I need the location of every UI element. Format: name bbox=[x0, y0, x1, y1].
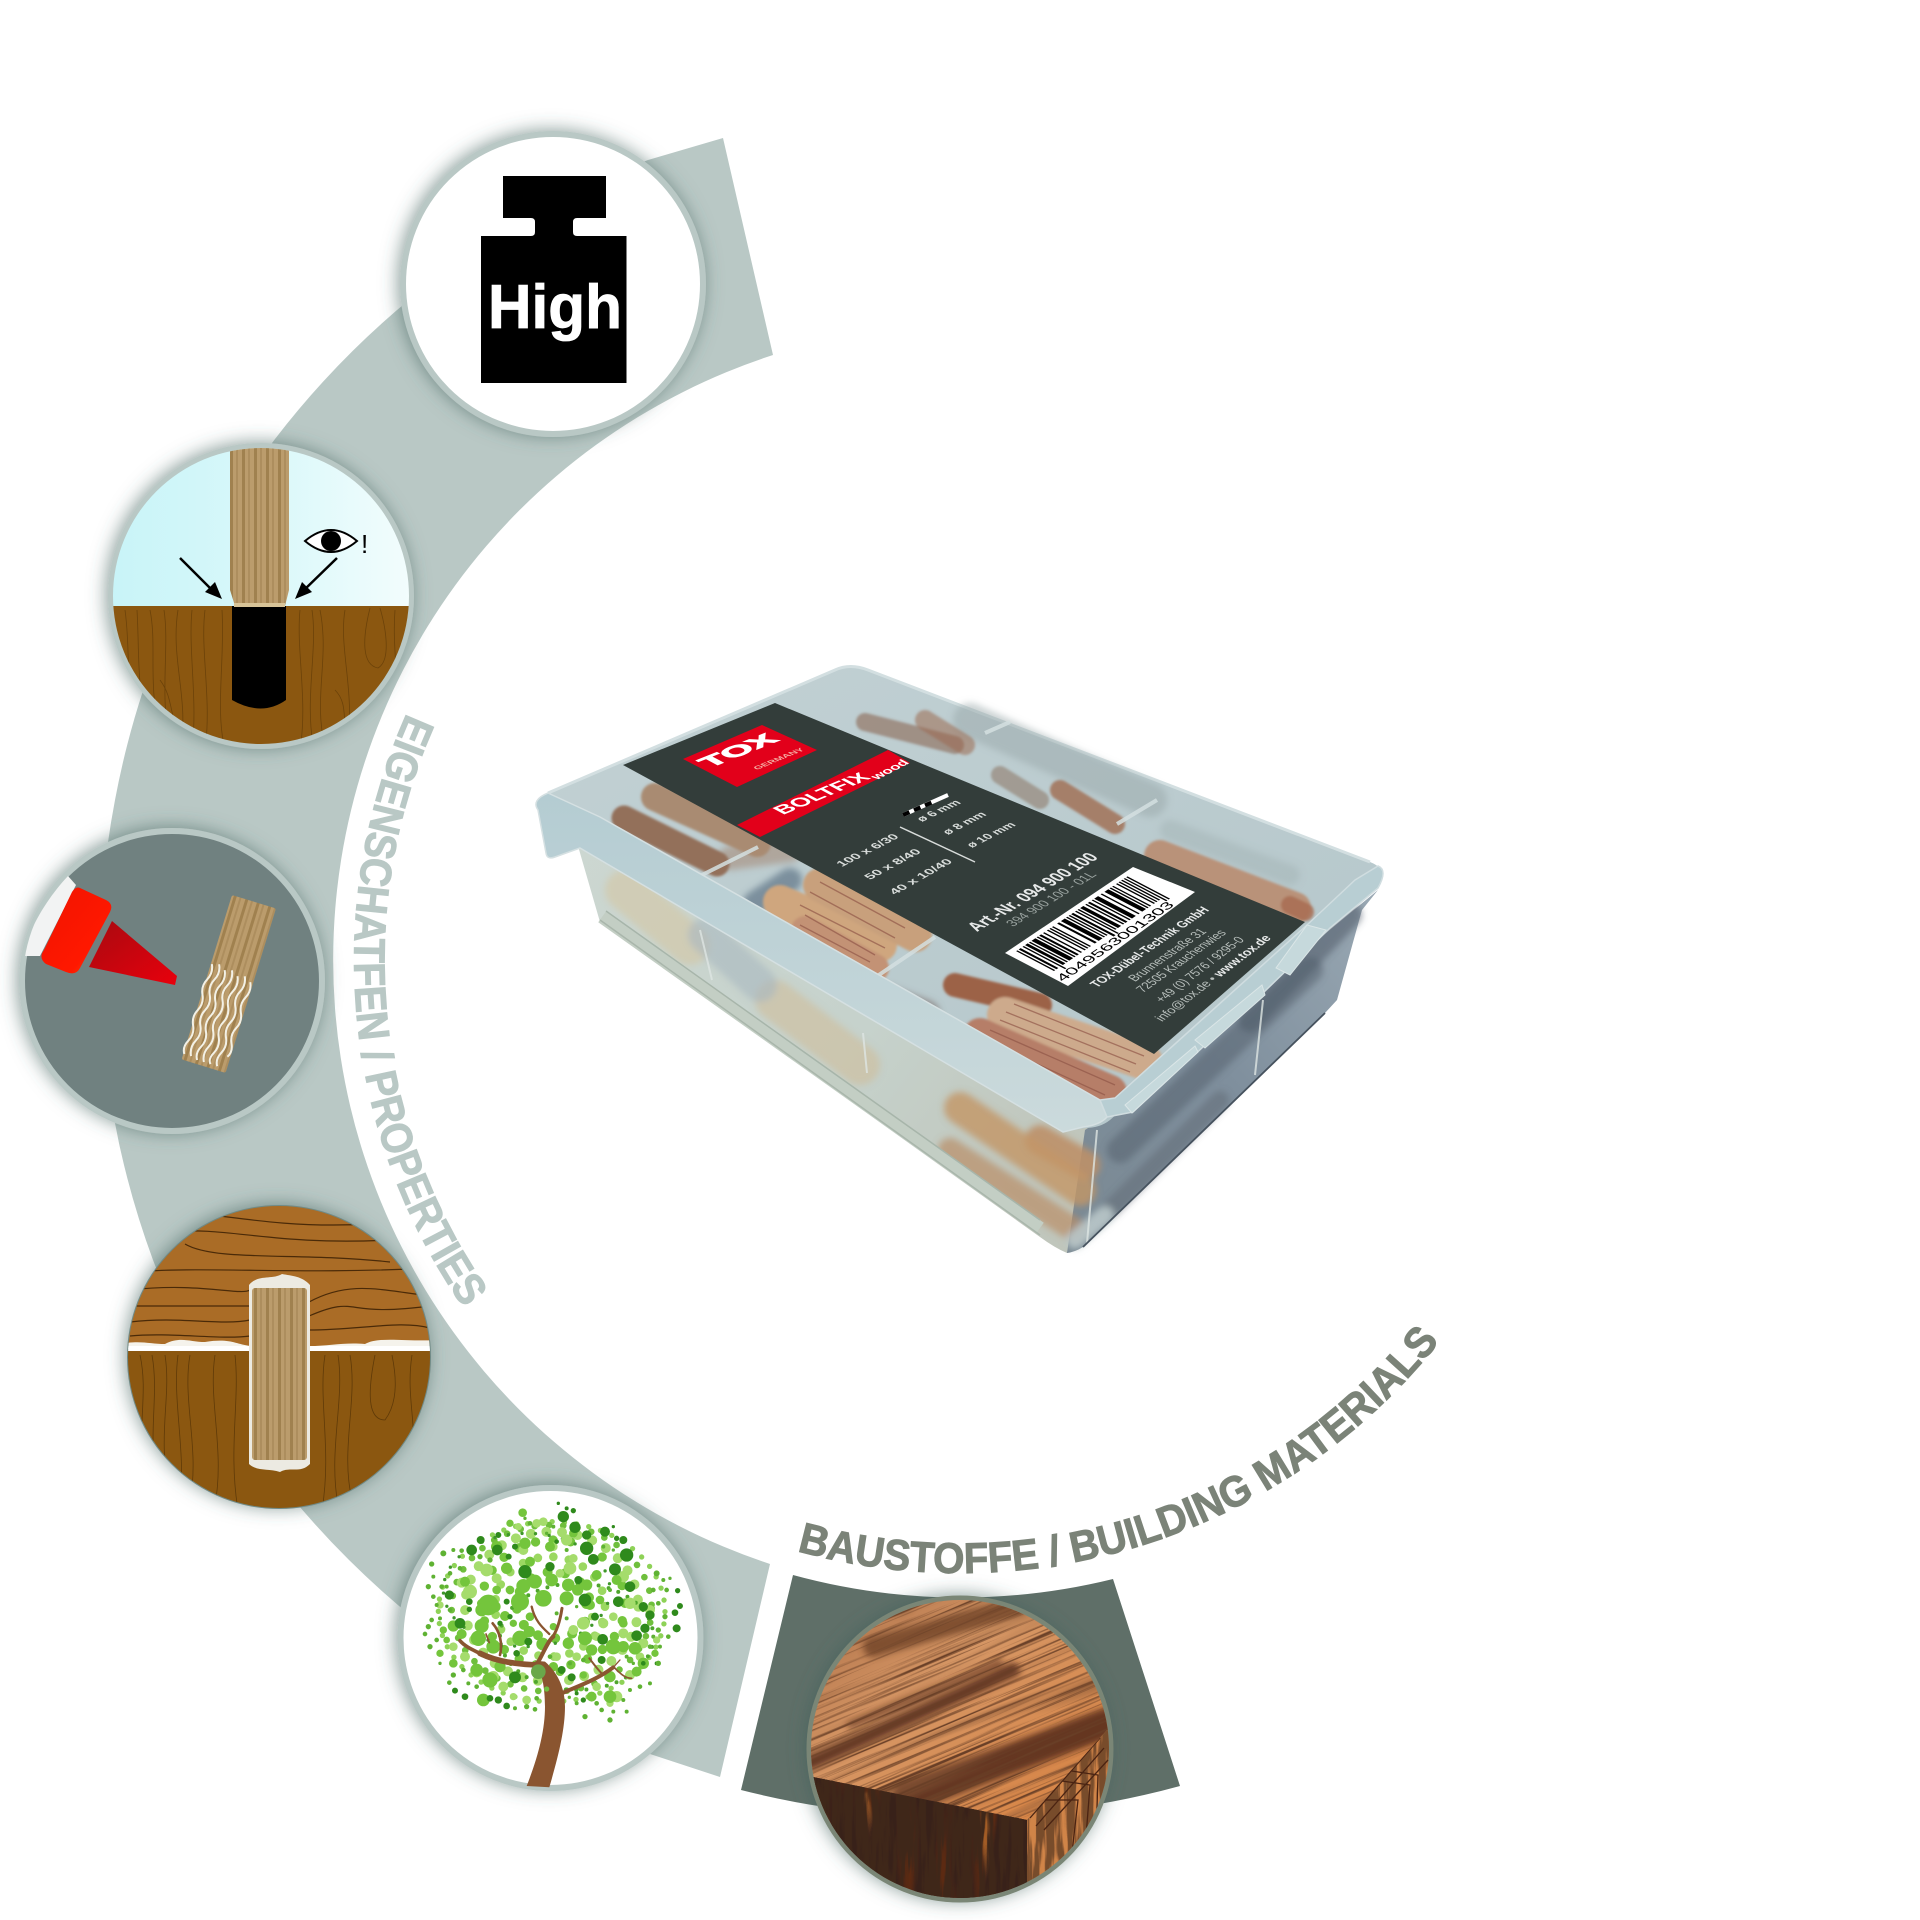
compartment lines on side bbox=[700, 930, 1263, 1243]
heading: building materials: BAUSTOFFE / BUILDING MATERIALS bbox=[799, 1326, 1436, 1574]
barcode bbox=[1005, 867, 1195, 986]
box rim right bbox=[1100, 866, 1383, 1117]
product band: BOLTFIX: BOLTFIX bbox=[768, 770, 876, 817]
company address bbox=[1086, 904, 1274, 1023]
contents and diameter text: 40 x 10/40 bbox=[886, 857, 956, 896]
dowels inside compartments bbox=[624, 720, 1305, 1092]
tree trunk and branches bbox=[460, 1607, 632, 1787]
product: transparent dowel box bbox=[536, 666, 1383, 1253]
product band: BOLTFIX: wood bbox=[866, 757, 912, 782]
panel: building materials band bbox=[741, 1575, 1180, 1817]
lid back rim highlight bbox=[548, 666, 1370, 862]
company address: Brunnenstraße 31 bbox=[1124, 926, 1210, 983]
box left side bbox=[578, 846, 1100, 1253]
icon: drill hole depth check bbox=[110, 440, 420, 756]
shadowy compartment content bbox=[730, 720, 1290, 1015]
arrow: right pointer bbox=[295, 558, 337, 599]
contents and diameter text: ø 10 mm bbox=[963, 820, 1019, 849]
company address: TOX-Dübel-Technik GmbH bbox=[1086, 904, 1212, 989]
box lid surface bbox=[536, 666, 1382, 1132]
company address: +49 (0) 7576 / 9295-0 bbox=[1151, 934, 1248, 1004]
box rim front bbox=[536, 793, 1107, 1132]
icon: glue nozzle applying to dowel bbox=[22, 831, 322, 1131]
barcode: 4049563001303 bbox=[1053, 900, 1178, 984]
compartment dividers bbox=[692, 722, 1157, 983]
icon: eye warning: ! bbox=[361, 529, 368, 559]
icon: wood sample photo bbox=[800, 1581, 1116, 1915]
product band: BOLTFIX bbox=[737, 750, 912, 837]
icon: drill bit bbox=[903, 795, 948, 815]
box right side bbox=[1067, 890, 1378, 1253]
heading: properties: EIGENSCHATFEN / PROPERTIES bbox=[354, 714, 486, 1304]
icon: weight high load: High bbox=[488, 273, 622, 342]
rim clips bbox=[1125, 925, 1326, 1113]
icon: glued dowel joint bbox=[120, 1200, 440, 1511]
panel: properties arc band bbox=[100, 138, 773, 1777]
logo: TOX bbox=[683, 725, 817, 787]
icon: eye warning bbox=[305, 529, 368, 559]
article number bbox=[963, 850, 1103, 934]
icon: weight high load bbox=[403, 134, 703, 434]
box base edge bbox=[1083, 1013, 1325, 1247]
label bbox=[623, 703, 1305, 1054]
icon: tree bbox=[400, 1488, 700, 1788]
company address: 72505 Krauchenwies bbox=[1132, 927, 1229, 994]
contents and diameter text: 100 x 6/30 bbox=[833, 832, 902, 868]
contents and diameter text: ø 6 mm bbox=[913, 798, 964, 823]
contents and diameter text: ø 8 mm bbox=[939, 810, 990, 836]
box base ridge bbox=[600, 911, 1040, 1235]
icon: dowel with glue bbox=[181, 895, 276, 1073]
contents and diameter text bbox=[833, 798, 1019, 896]
tree crown leaves bbox=[423, 1502, 682, 1722]
logo: TOX: TOX bbox=[692, 731, 785, 771]
dowel grooves bbox=[800, 875, 1144, 1095]
arrow: left pointer bbox=[180, 558, 222, 599]
article number: Art.-Nr. 094 900 100 bbox=[963, 850, 1103, 934]
logo: TOX: GERMANY bbox=[751, 746, 807, 771]
dowels visible through box sides bbox=[625, 890, 1350, 1240]
contents and diameter text: 50 x 8/40 bbox=[861, 847, 924, 881]
company address: info@tox.de • www.tox.de bbox=[1151, 932, 1274, 1023]
article number: 394 900 100 - 01L bbox=[1003, 870, 1101, 929]
divider line bbox=[900, 827, 975, 862]
